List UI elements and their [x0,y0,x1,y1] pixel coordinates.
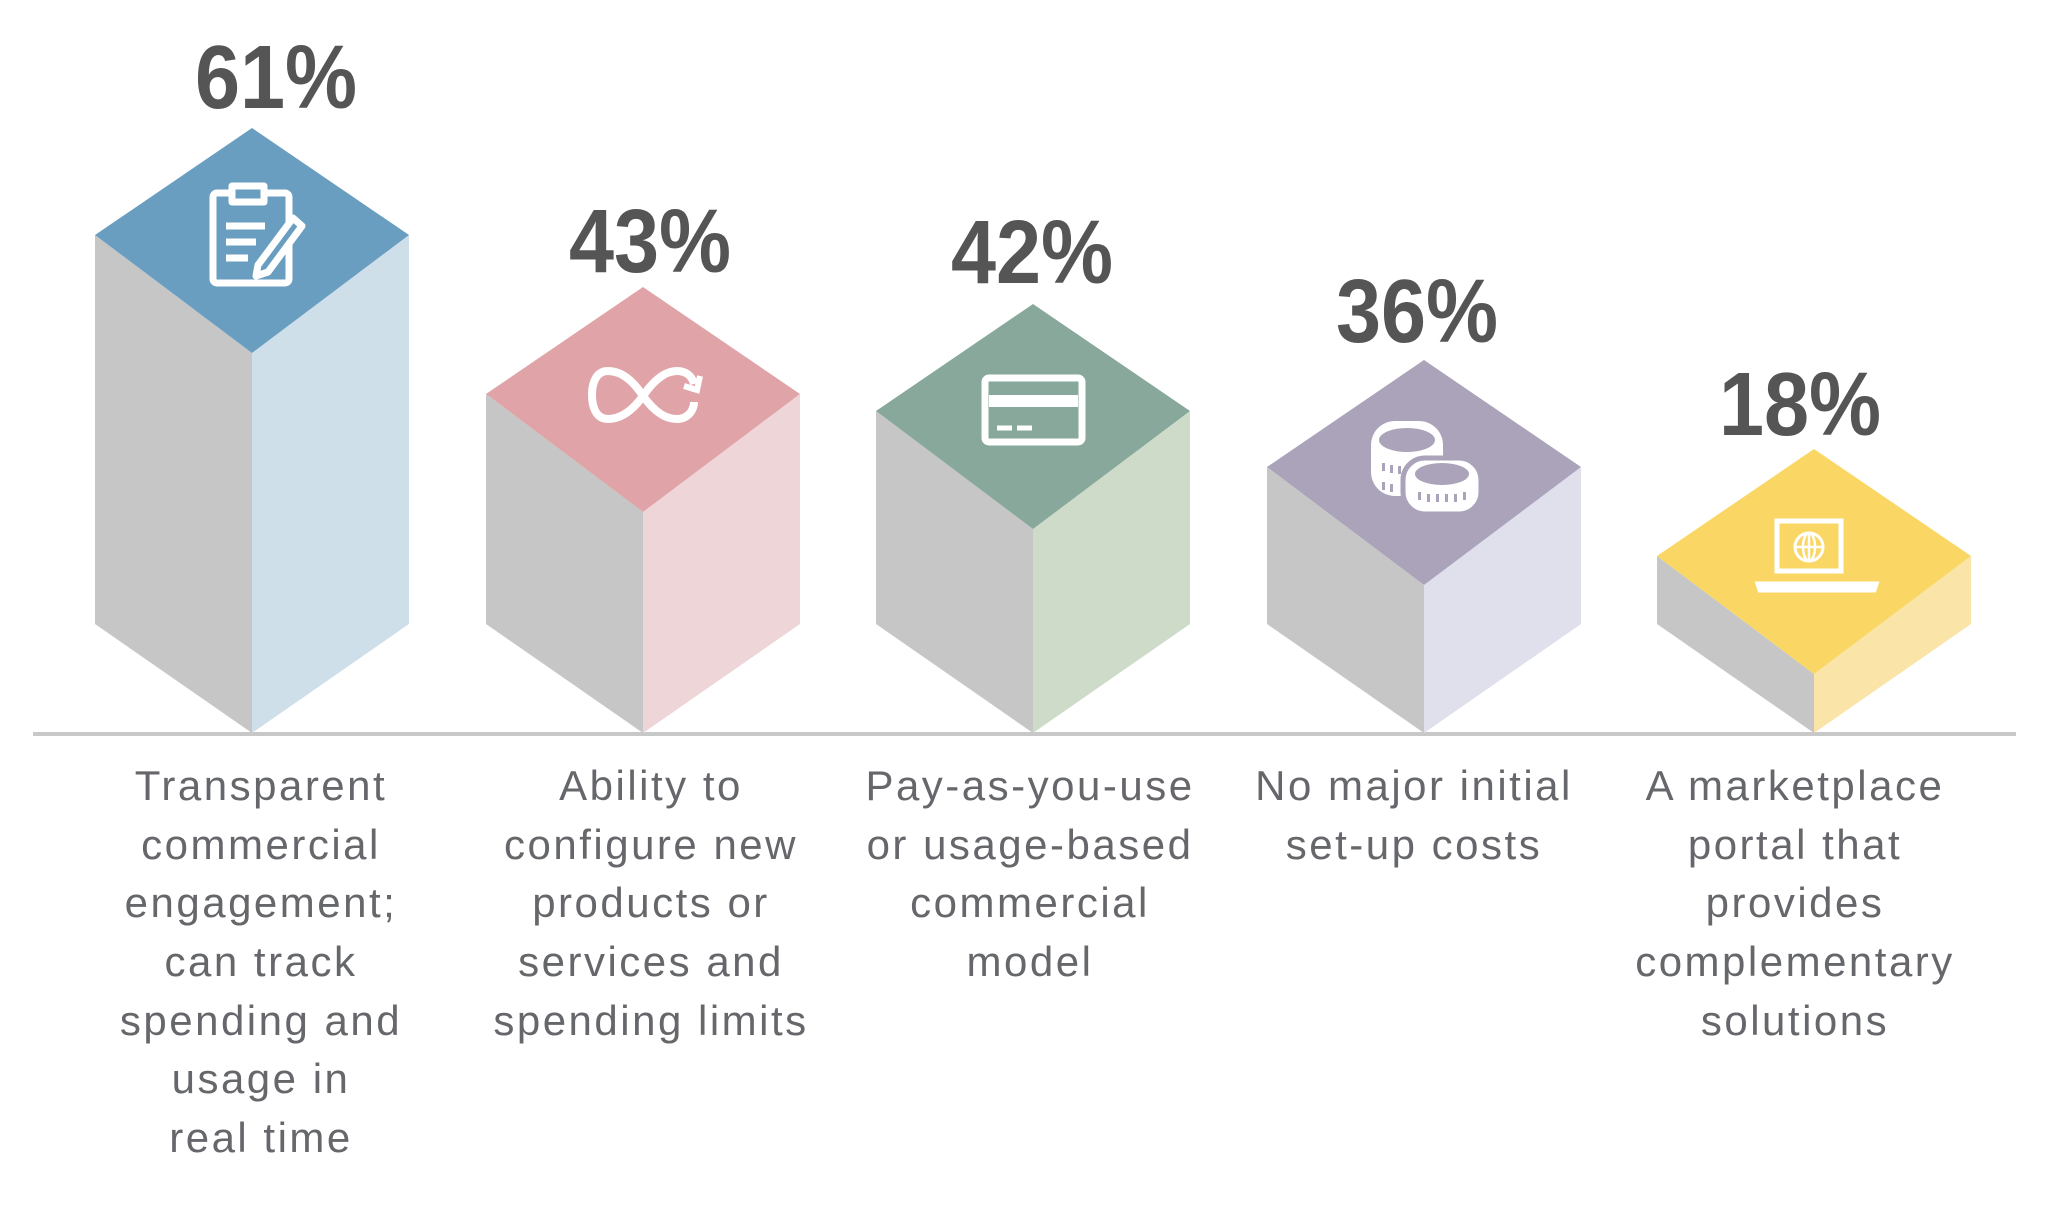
label 1: can track [165,938,357,985]
label 4: set-up costs [1286,821,1542,868]
label 3: model [967,938,1093,985]
icon: clipboard with pencil [213,186,302,283]
icon: laptop with globe [1758,521,1876,590]
label 2: spending limits [493,997,809,1044]
label 1: engagement; [125,879,397,926]
bar 5: 18% marketplace portal [1657,354,1971,733]
value: 43%: 43% [569,191,731,292]
value: 42%: 42% [951,202,1113,303]
label 2: Ability to [559,762,743,809]
label 2: products or [532,879,770,926]
label 1: spending and [120,997,402,1044]
label 1: Transparent [135,762,387,809]
bar 4: 36% no set-up costs [1267,261,1581,733]
icon: coin stacks [1371,421,1481,514]
label 1: usage in [172,1055,350,1102]
baseline axis [33,732,2016,736]
label 3: commercial [910,879,1150,926]
value: 36%: 36% [1336,261,1498,362]
icon: credit card [985,378,1082,442]
icon: infinity loop arrow [592,371,700,419]
label 5: A marketplace [1646,762,1944,809]
label 3: Pay-as-you-use [865,762,1195,809]
label 5: solutions [1701,997,1889,1044]
bar 2: 43% configure new products [486,191,800,733]
bar 3: 42% pay-as-you-use [876,202,1190,733]
bar 1: 61% transparent commercial engagement [95,27,409,733]
value: 18%: 18% [1719,354,1881,455]
label 5: provides [1706,879,1884,926]
label 5: complementary [1635,938,1955,985]
label 2: configure new [504,821,798,868]
label 2: services and [518,938,784,985]
value: 61%: 61% [195,27,357,128]
label 1: commercial [141,821,381,868]
label 5: portal that [1688,821,1902,868]
label 4: No major initial [1255,762,1573,809]
label 3: or usage-based [867,821,1193,868]
label 1: real time [169,1114,353,1161]
